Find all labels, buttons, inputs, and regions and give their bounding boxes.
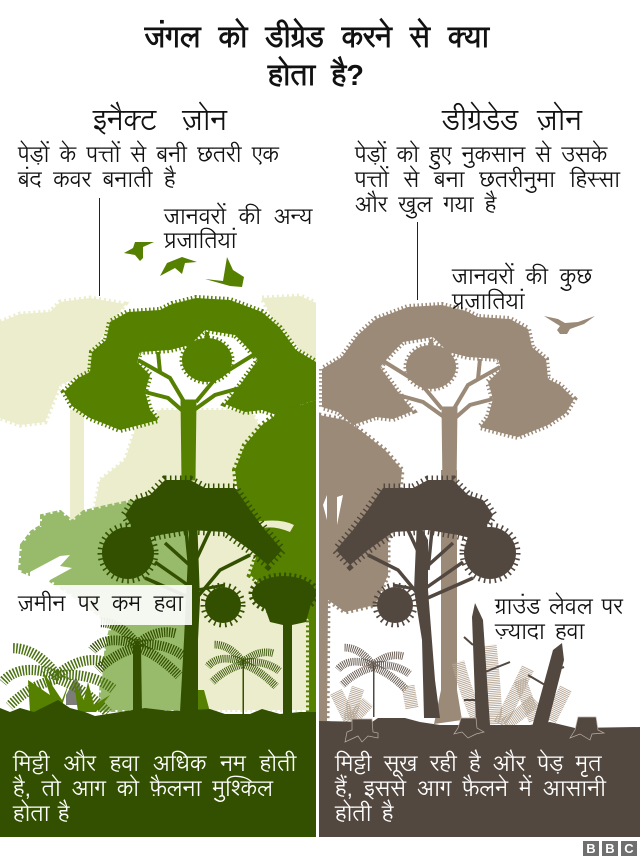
- white callout: less wind on the ground: [15, 585, 192, 625]
- text: dry soil: होती है: [334, 798, 394, 826]
- text: moist soil: है, तो आग को फ़ैलना मुश्किल: [12, 773, 274, 803]
- BBC logo: C: [624, 841, 634, 856]
- tree fern: [208, 645, 279, 716]
- text: degraded canopy: पेड़ों को हुए नुकसान से उसके: [354, 139, 608, 170]
- main canopy tree: [64, 298, 316, 480]
- panel: intact forest: [0, 296, 316, 837]
- panel: degraded forest: [319, 305, 640, 837]
- text: degraded canopy: और खुल गया है: [355, 189, 497, 220]
- text: other animal species: जानवरों की अन्य: [163, 201, 313, 229]
- dark brown tree: [336, 480, 516, 623]
- BBC logo: B: [586, 841, 596, 856]
- dark tree: [102, 480, 282, 623]
- text: intact canopy: बंद कवर बनाती है: [17, 164, 176, 192]
- big fern: [3, 648, 113, 713]
- text: other animal species: [163, 201, 313, 253]
- ground: degraded: [319, 718, 640, 837]
- title: जंगल को डीग्रेड करने से क्या: [144, 17, 491, 54]
- leader line right: [417, 222, 418, 300]
- middle palm: [92, 622, 183, 715]
- text: dry soil: हैं, इससे आग फ़ैलने में आसानी: [334, 773, 607, 801]
- light background trees: [0, 296, 316, 710]
- text: other animal species: प्रजातियां: [163, 226, 238, 253]
- right palm: [252, 576, 316, 715]
- BBC logo: B: [605, 841, 615, 856]
- leader line left: [99, 198, 100, 296]
- title: [144, 17, 491, 92]
- tree fern: [338, 648, 409, 717]
- text: degraded canopy: पत्तों से बना छतरीनुमा हिस्सा: [354, 164, 621, 194]
- side green tree: [235, 400, 316, 716]
- text: more wind at ground level: ज़्यादा हवा: [494, 619, 586, 644]
- green trunk accent: [192, 520, 197, 580]
- text: intact canopy: [17, 139, 280, 192]
- text: moist soil: होता है: [12, 798, 70, 826]
- brown trunks: [434, 470, 462, 724]
- text: moist soil: मिट्टी और हवा अधिक नम होती: [12, 748, 297, 776]
- text: some animal species: जानवरों की कुछ: [451, 261, 592, 292]
- text: intact canopy: पेड़ों के पत्तों से बनी छतरी एक: [17, 139, 280, 167]
- text: dry soil: मिट्टी सूख रही है और पेड़ मृत: [334, 748, 602, 778]
- icon: tree stumps: [345, 717, 604, 742]
- text: moist soil: [12, 748, 297, 826]
- medium green tree: [20, 500, 190, 710]
- brown main canopy tree: [322, 305, 574, 487]
- white callout: less wind on the ground: ज़मीन पर कम हवा: [17, 589, 184, 616]
- BBC logo: [583, 841, 637, 856]
- pale fronds: [336, 645, 566, 724]
- text: more wind at ground level: [494, 591, 623, 644]
- heading: intact zone: इनैक्ट ज़ोन: [92, 101, 228, 137]
- text: some animal species: प्रजातियां: [451, 287, 526, 314]
- icon: green birds: [124, 242, 244, 287]
- white gaps and grey rock: [66, 645, 105, 705]
- ground: intact: [0, 700, 316, 837]
- text: degraded canopy: [354, 139, 621, 220]
- icon: brown bird: [544, 316, 595, 334]
- text: dry soil: [334, 748, 607, 826]
- broken trunks: [464, 603, 564, 727]
- heading: degraded zone: डीग्रेडेड ज़ोन: [441, 101, 582, 137]
- text: more wind at ground level: ग्राउंड लेवल पर: [494, 591, 623, 619]
- text: some animal species: [451, 261, 592, 314]
- title: होता है?: [267, 55, 364, 92]
